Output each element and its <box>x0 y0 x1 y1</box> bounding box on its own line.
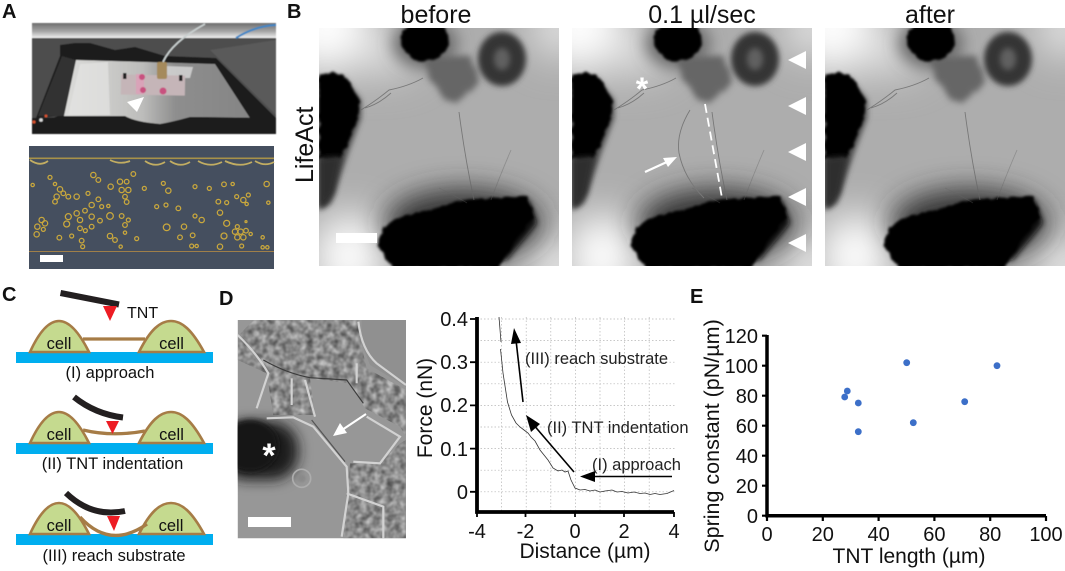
x tick labels: 20 <box>812 524 834 546</box>
schematic: approach: TNT <box>127 305 158 322</box>
scale bar <box>40 255 63 262</box>
x tick labels: 2 <box>618 521 630 543</box>
axes <box>767 335 1046 516</box>
data points <box>841 359 1000 435</box>
panel: B <box>288 4 1065 266</box>
curve <box>499 317 674 494</box>
x tick labels: 100 <box>1029 524 1063 546</box>
x tick labels <box>468 521 680 543</box>
y axis title: Force (nN) <box>414 358 437 458</box>
y tick labels: 0.1 <box>440 439 468 461</box>
micrograph: AFM tip and cells <box>220 320 406 538</box>
panel: C <box>2 284 213 565</box>
axis label: LifeAct: LifeAct <box>291 107 319 183</box>
arrow: indentation <box>526 415 574 472</box>
x tick labels: 4 <box>668 521 680 543</box>
chart: force curve <box>414 309 689 563</box>
x tick labels: -4 <box>468 521 486 543</box>
x tick labels <box>761 524 1063 546</box>
x tick labels: 40 <box>867 524 890 546</box>
y tick labels: 80 <box>736 386 758 408</box>
x axis title: Distance (µm) <box>519 540 651 563</box>
annotation: indentation: (II) TNT indentation <box>547 419 689 437</box>
schematic: TNT indentation: cell <box>159 426 184 444</box>
x tick labels: 0 <box>761 524 773 546</box>
arrow: approach <box>580 471 672 482</box>
y tick labels: 0 <box>457 482 468 504</box>
image: before <box>319 28 559 266</box>
heading: after: after <box>905 1 955 29</box>
schematic: TNT indentation: cell <box>47 426 71 444</box>
schematic: approach: cell <box>159 335 184 353</box>
schematic: reach substrate: (III) reach substrate <box>42 547 186 565</box>
x tick labels: 0 <box>569 521 581 543</box>
y axis title: Spring constant (pN/µm) <box>700 319 724 553</box>
y tick labels: 100 <box>725 356 758 378</box>
schematic: approach <box>16 293 213 382</box>
x tick labels: 60 <box>923 524 946 546</box>
heading: 0.1 µl/sec: 0.1 µl/sec <box>648 1 756 29</box>
schematic: approach: cell <box>47 335 71 353</box>
annotation: approach: (I) approach <box>592 456 681 474</box>
photo: flow chamber on microscope stage <box>32 23 276 134</box>
chart: scatter plot <box>700 319 1063 568</box>
schematic: TNT indentation <box>16 397 213 473</box>
y tick labels: 0.3 <box>440 352 468 374</box>
x axis title: TNT length (µm) <box>833 545 985 568</box>
image: 0.1 µl/sec <box>572 28 812 266</box>
y tick labels: 120 <box>725 326 758 348</box>
label C: C <box>2 284 16 306</box>
schematic: reach substrate: cell <box>159 517 183 535</box>
arrow <box>645 157 677 172</box>
panel: E <box>690 286 1063 568</box>
icon: white arrowhead <box>127 97 144 112</box>
schematic: TNT indentation: (II) TNT indentation <box>42 455 183 473</box>
x tick labels: 80 <box>979 524 1001 546</box>
y tick labels <box>725 326 758 528</box>
axes <box>477 317 674 512</box>
y tick labels: 40 <box>736 446 758 468</box>
label E: E <box>690 286 703 308</box>
y tick labels: 0.2 <box>440 395 468 417</box>
panel: A <box>2 1 276 269</box>
image: after <box>825 28 1065 266</box>
arrow <box>333 414 366 436</box>
arrow: substrate <box>511 328 523 402</box>
asterisk: * <box>262 437 276 475</box>
y tick labels: 60 <box>736 416 758 438</box>
y tick labels <box>440 309 468 504</box>
label B: B <box>287 1 301 23</box>
y tick labels: 0.4 <box>440 309 468 331</box>
panel: D <box>219 288 689 563</box>
white arrowheads <box>788 51 806 252</box>
y tick labels: 20 <box>736 476 758 498</box>
label A: A <box>2 1 16 23</box>
asterisk: * <box>636 71 649 107</box>
x tick labels: -2 <box>517 521 534 543</box>
dashed line <box>705 104 722 198</box>
annotation: reach substrate: (III) reach substrate <box>525 350 668 368</box>
scale bar <box>248 517 291 527</box>
schematic: approach: (I) approach <box>66 364 154 382</box>
schematic: reach substrate: cell <box>47 517 71 535</box>
scale bar <box>336 233 377 243</box>
label D: D <box>219 288 233 310</box>
micrograph: channel with cells <box>29 146 274 269</box>
y tick labels: 0 <box>747 506 758 528</box>
heading: before: before <box>401 1 471 29</box>
schematic: reach substrate <box>16 493 213 565</box>
